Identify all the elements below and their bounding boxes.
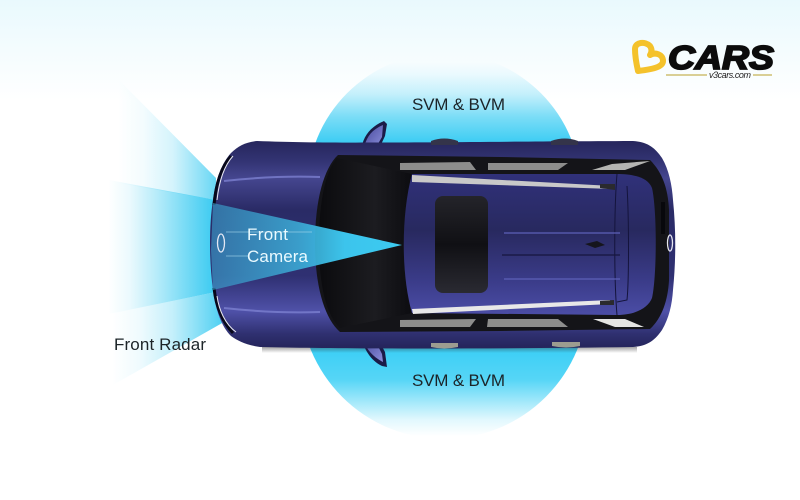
- rear badge: [668, 235, 672, 251]
- label: Front Camera: Front: [247, 225, 288, 244]
- windshield: [319, 158, 412, 328]
- hood front edge: [214, 156, 233, 333]
- label: Front Camera: Camera: [247, 247, 309, 266]
- side glass: bottom: [400, 319, 644, 327]
- mirror: top: [361, 121, 387, 153]
- logo wordmark: CARS: [668, 39, 774, 76]
- car top view: [210, 121, 675, 367]
- rail ends: [600, 184, 615, 305]
- mirror: bottom: [360, 336, 387, 367]
- label: bottom SVM & BVM: SVM & BVM: [412, 371, 505, 390]
- sunroof: [435, 196, 488, 293]
- logo: V3Cars: [635, 39, 774, 80]
- logo underline: [666, 74, 772, 76]
- roof rail: top: [412, 175, 612, 189]
- hood highlight lines: [224, 177, 320, 312]
- roof rail: bottom: [412, 300, 610, 314]
- front radar fan: [100, 81, 224, 390]
- roof: [404, 174, 656, 315]
- logo heart icon: [635, 43, 663, 71]
- roof lines: [504, 233, 620, 279]
- door handles: top: [431, 138, 578, 145]
- car body: [210, 141, 675, 348]
- front camera cone: [211, 203, 402, 290]
- shark fin antenna: [585, 241, 605, 248]
- front badge and hood lines: [218, 232, 312, 256]
- window band: [315, 155, 669, 332]
- door handles: bottom: [431, 342, 580, 348]
- label: top SVM & BVM: SVM & BVM: [412, 95, 505, 114]
- coverage zone: bottom SVM & BVM: [310, 348, 578, 432]
- logo url: v3cars.com: [709, 70, 752, 80]
- label: Front Radar: Front Radar: [114, 335, 206, 354]
- car shadow: [262, 347, 637, 353]
- side glass: top: [400, 161, 650, 170]
- rear wiper: [661, 202, 665, 234]
- hood front white trim: [217, 156, 236, 332]
- tailgate seam: [615, 174, 628, 315]
- coverage zone: top SVM & BVM: [316, 68, 572, 143]
